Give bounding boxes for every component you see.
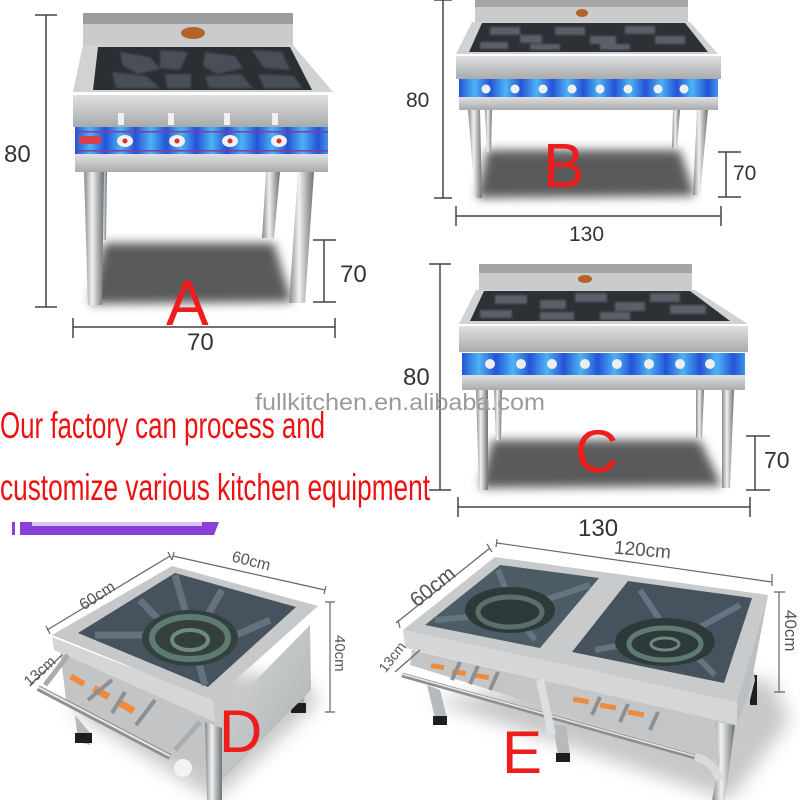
dimensions B: 70 [733,162,756,185]
dimensions D [21,549,348,712]
headline text: Our factory can process and [0,405,325,446]
dimensions B [406,0,756,246]
dimensions A: 70 [187,329,214,356]
stove D [38,566,320,800]
stove A [73,13,333,305]
dimensions B: 130 [569,223,604,246]
label E: E [502,719,542,786]
dimensions E: 13cm [375,639,409,675]
dimensions E: 60cm [406,562,460,612]
dimensions D: 60cm [77,578,119,614]
label D: D [219,698,262,765]
label A: A [166,267,209,339]
dimensions C: 70 [764,447,790,473]
dimensions D: 40cm [331,635,348,672]
dimensions E: 40cm [781,610,800,652]
headline text: customize various kitchen equipment [0,467,430,508]
label C: C [575,418,618,485]
dimensions C: 80 [403,364,430,391]
dimensions C [403,264,790,542]
dimensions A [4,15,367,356]
label B: B [543,132,584,201]
stove B [456,0,721,198]
purple strip [12,522,219,535]
stove C [459,264,748,490]
dimensions D: 60cm [230,549,272,575]
dimensions A: 80 [4,141,31,168]
watermark: fullkitchen.en.alibaba.com [255,389,545,415]
dimensions C: 130 [578,515,618,542]
headline text [0,405,430,508]
dimensions E: 120cm [613,538,672,563]
dimensions A: 70 [340,261,367,288]
dimensions B: 80 [406,89,429,112]
dimensions E [375,538,800,692]
dimensions D: 13cm [21,653,59,690]
stove E [402,557,790,800]
